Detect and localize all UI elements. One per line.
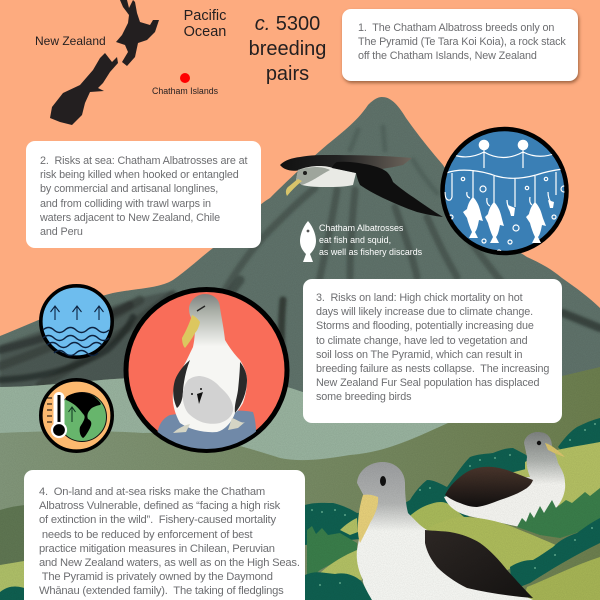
icon: rising sea level bbox=[41, 286, 112, 357]
far bushes and lime hills bbox=[305, 418, 600, 545]
back albatross bbox=[444, 432, 565, 527]
albatross with chick circle bbox=[126, 290, 287, 460]
text box 3: 3. Risks on land: High chick mortality on hot days will likely increase due to climate change. Storms and flooding, potentially increasing due to climate change, have led to vegetation and soil loss on The Pyramid, which can result in breeding failure as nests collapse. The increasing New Zealand Fur Seal population has displaced some breeding birds bbox=[316, 292, 549, 403]
label: New Zealand: New Zealand bbox=[35, 34, 106, 48]
green hills bbox=[0, 367, 600, 600]
text box 4: 4. On-land and at-sea risks make the Chatham Albatross Vulnerable, defined as “facing a high risk of extinction in the wild”. Fishery-caused mortality needs to be reduced by enforcement of best practice mitigation measures in Chilean, Peruvian and New Zealand waters, as well as on the High Seas. The Pyramid is privately owned by the Daymond Whānau (extended family). The taking of fledglings bbox=[39, 486, 300, 597]
label: Chatham Islands: Chatham Islands bbox=[152, 86, 218, 96]
icon: fish bbox=[300, 221, 316, 262]
foreground hills, bushes and grass bbox=[305, 423, 600, 600]
red dot: Chatham Islands bbox=[180, 73, 190, 83]
label: Pacific Ocean: Pacific Ocean bbox=[184, 8, 226, 40]
map: New Zealand bbox=[50, 0, 159, 125]
heading: breeding pairs: c. 5300 breeding pairs bbox=[249, 13, 326, 85]
text box 2: 2. Risks at sea: Chatham Albatrosses are at risk being killed when hooked or entangled by commercial and artisanal longlines, and from colliding with trawl warps in waters adjacent to New Zealand, Chile and Peru bbox=[40, 155, 247, 238]
fish diet note: Chatham Albatrosses eat fish and squid, as well as fishery discards bbox=[319, 223, 422, 257]
text box 1 bbox=[342, 9, 578, 81]
text box 1: 1. The Chatham Albatross breeds only on The Pyramid (Te Tara Koi Koia), a rock stack off the Chatham Islands, New Zealand bbox=[358, 22, 566, 62]
icon: warming globe bbox=[41, 380, 112, 451]
mountain bbox=[0, 97, 600, 420]
front albatross bbox=[357, 462, 533, 600]
flying albatross bbox=[280, 155, 443, 217]
text box 3 bbox=[303, 279, 562, 423]
fishing gear circle bbox=[442, 129, 567, 254]
text box 2 bbox=[26, 141, 261, 248]
